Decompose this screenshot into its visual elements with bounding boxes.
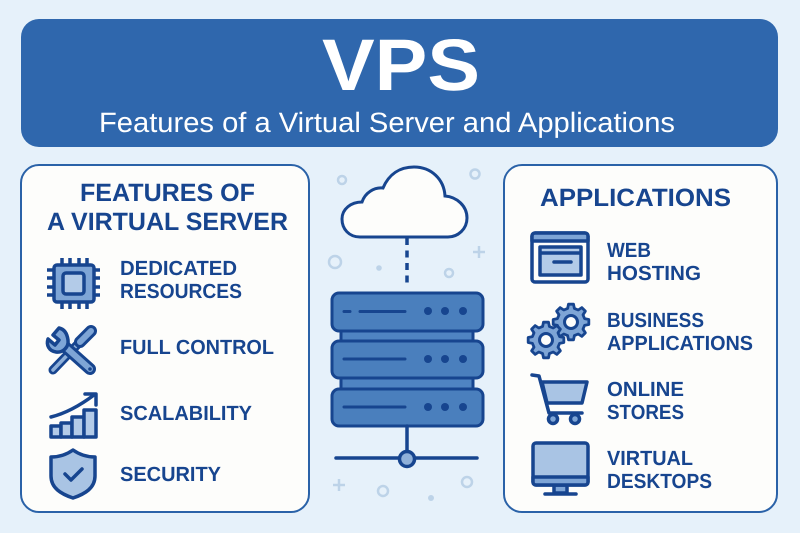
- text: business applications: BUSINESS: [607, 309, 704, 332]
- panel: features of a virtual server: [21, 165, 309, 512]
- icon: chip: [47, 258, 100, 309]
- dashed connector: [405, 238, 409, 287]
- text: web hosting: WEB: [607, 239, 651, 262]
- text: virtual desktops: [607, 447, 712, 493]
- text: dedicated resources: RESOURCES: [120, 280, 242, 303]
- panel: applications: [504, 165, 777, 512]
- text: dedicated resources: DEDICATED: [120, 257, 237, 280]
- icon: monitor: [533, 443, 588, 494]
- text: business applications: [607, 309, 753, 355]
- title banner: [21, 19, 778, 147]
- text: dedicated resources: [120, 257, 242, 303]
- text: scalability: SCALABILITY: [120, 402, 252, 425]
- central server illustration: [329, 167, 485, 501]
- network node: [336, 426, 477, 466]
- heading: applications: APPLICATIONS: [540, 184, 731, 212]
- icon: shopping cart: [532, 375, 587, 424]
- heading: features: [47, 179, 288, 236]
- icon: growth chart: [51, 394, 96, 437]
- text: security: SECURITY: [120, 463, 221, 486]
- icon: gears: [528, 304, 589, 358]
- heading: features: A VIRTUAL SERVER: [47, 208, 288, 236]
- text: online stores: STORES: [607, 401, 684, 424]
- text: web hosting: HOSTING: [607, 262, 701, 285]
- text: online stores: [607, 378, 684, 424]
- icon: wrench and screwdriver: [47, 328, 92, 371]
- subtitle: Features of a Virtual Server and Applications: [99, 107, 675, 138]
- text: full control: FULL CONTROL: [120, 336, 274, 359]
- icon: web window: [532, 233, 588, 282]
- icon: shield: [51, 450, 95, 498]
- title: VPS: [322, 25, 480, 106]
- heading: features: FEATURES OF: [80, 179, 255, 207]
- text: virtual desktops: VIRTUAL: [607, 447, 693, 470]
- server stack: [332, 293, 483, 426]
- text: web hosting: [607, 239, 701, 285]
- text: virtual desktops: DESKTOPS: [607, 470, 712, 493]
- text: business applications: APPLICATIONS: [607, 332, 753, 355]
- text: online stores: ONLINE: [607, 378, 684, 401]
- icon: cloud: [342, 167, 467, 237]
